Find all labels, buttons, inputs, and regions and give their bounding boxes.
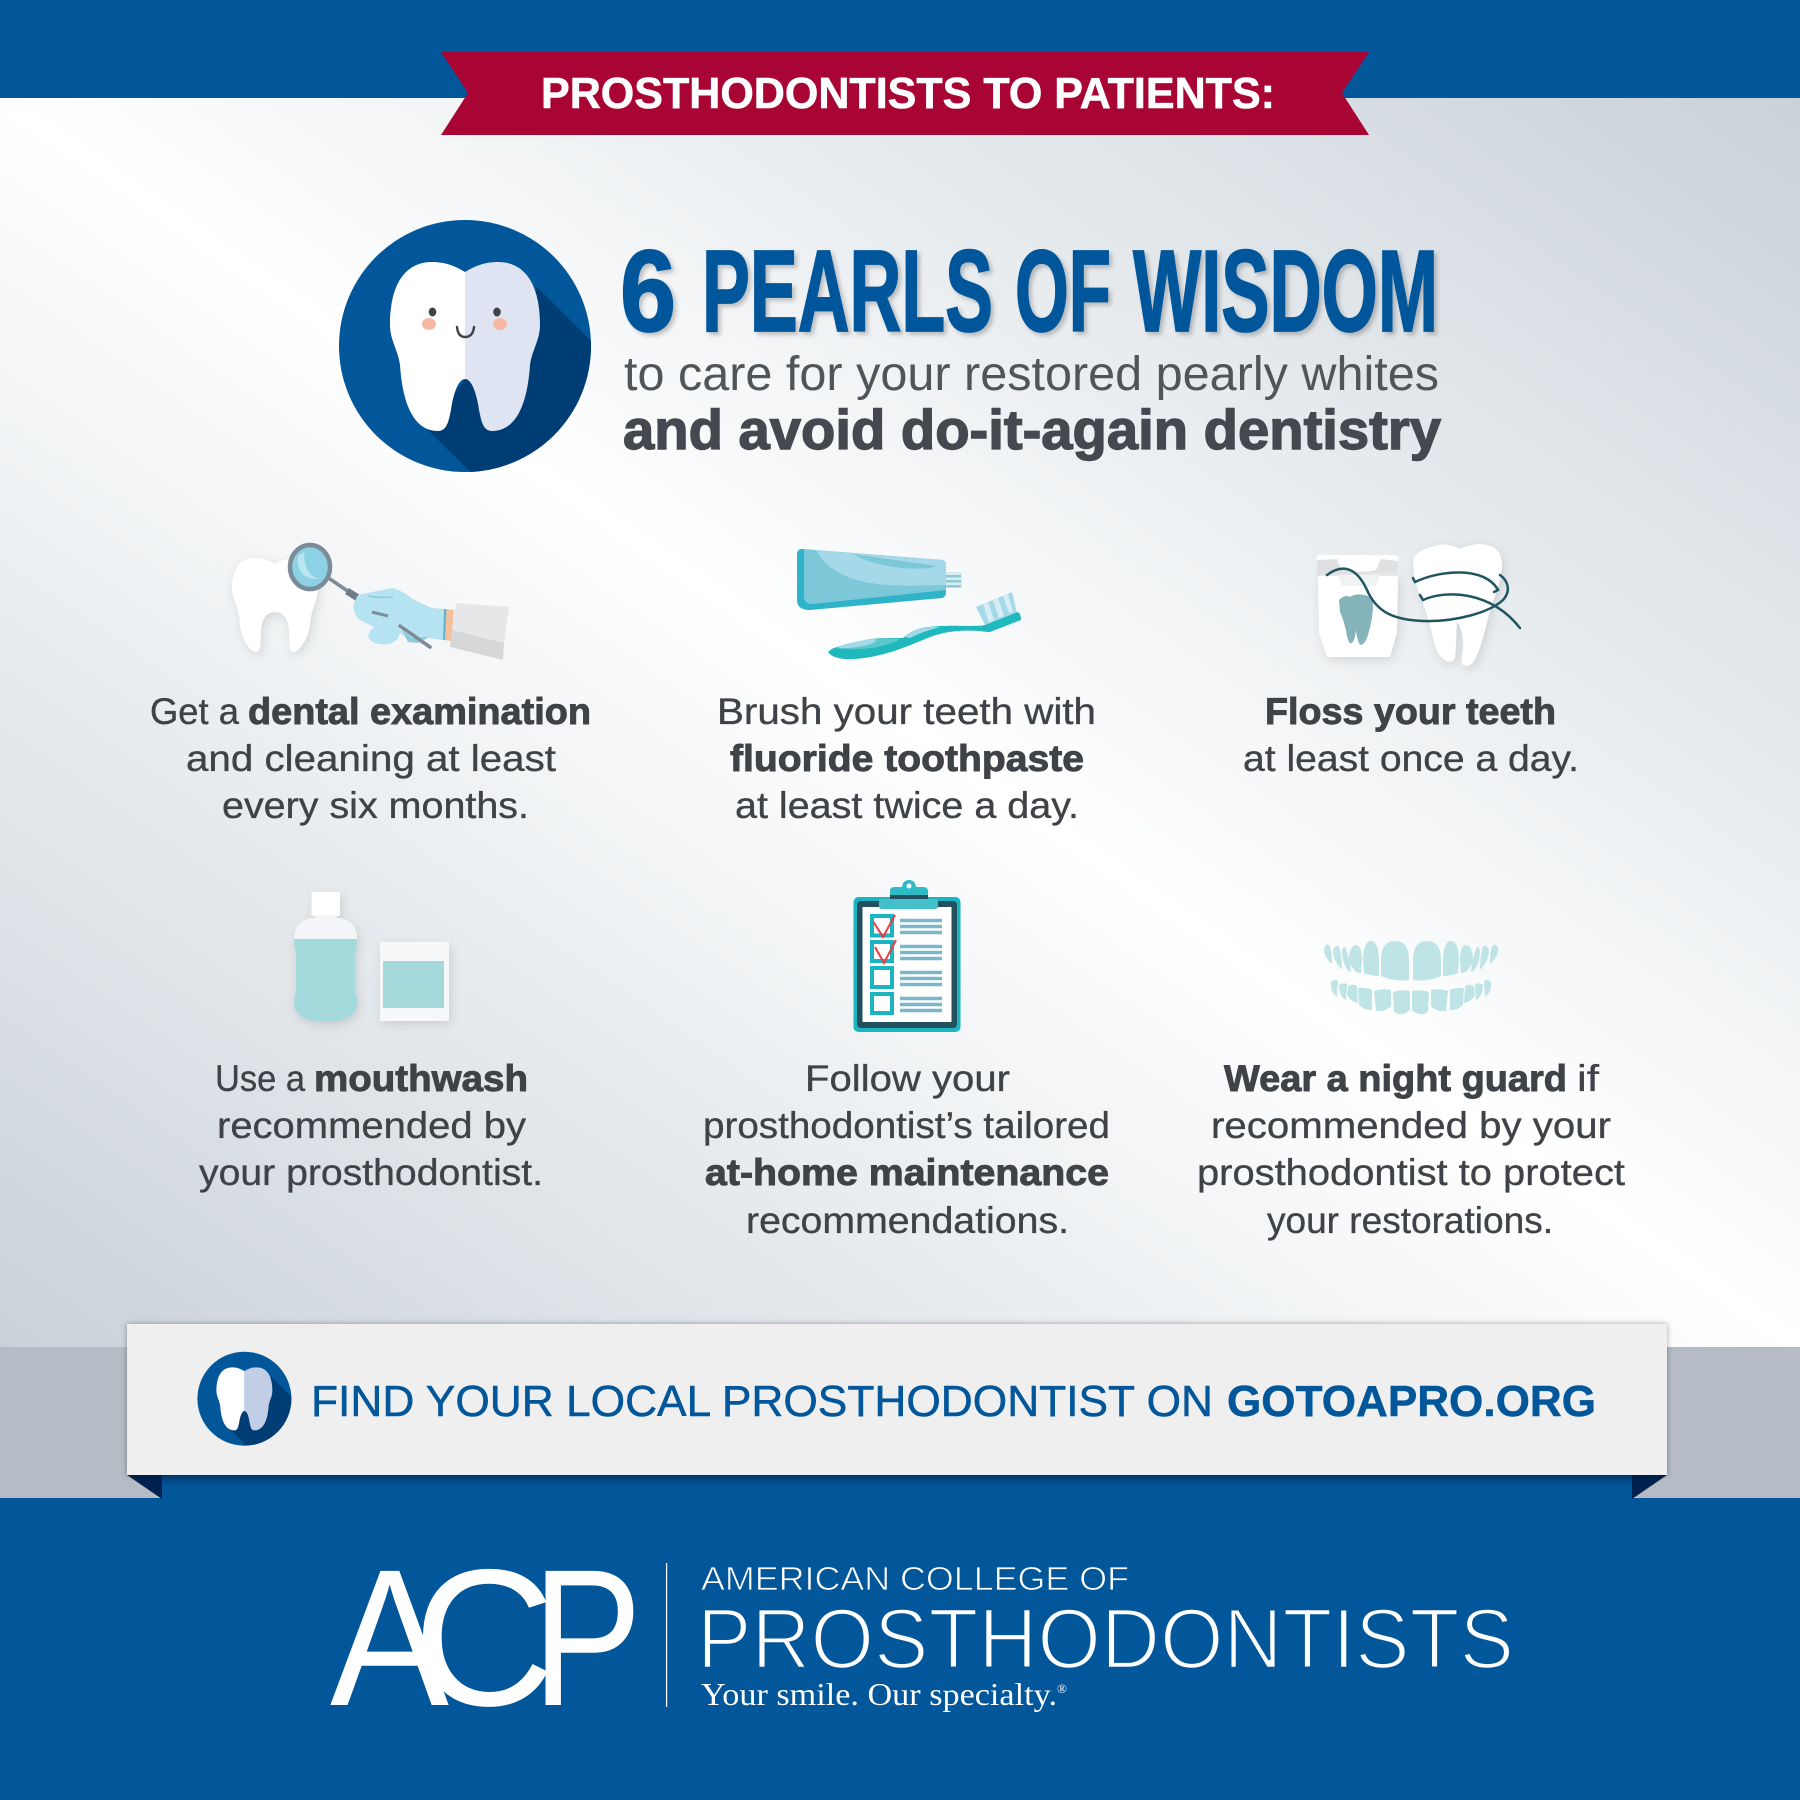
grey band behind call to action bbox=[0, 1347, 1800, 1498]
text: night guard: recommended by your bbox=[1211, 1105, 1611, 1146]
banner ribbon bbox=[441, 52, 1369, 135]
icon: smiling tooth badge bbox=[339, 220, 591, 472]
background gradient bbox=[0, 98, 1800, 1348]
clip bbox=[890, 880, 928, 898]
ribbon folds bbox=[127, 1475, 162, 1499]
call to action bar bbox=[124, 1320, 1670, 1499]
title: 6 bbox=[620, 226, 676, 356]
text: fluoride toothpaste: at least twice a day. bbox=[735, 785, 1079, 826]
footer logo bbox=[330, 1529, 1514, 1747]
icon: clipboard checklist bbox=[854, 880, 960, 1032]
ACP monogram: C bbox=[413, 1529, 555, 1747]
text: mouthwash: your prosthodontist. bbox=[199, 1152, 543, 1193]
icon: small tooth badge bbox=[197, 1352, 292, 1446]
top blue band bbox=[0, 0, 1800, 98]
registered mark: ® bbox=[1057, 1681, 1067, 1696]
icon: night guard teeth bbox=[1324, 941, 1498, 1014]
icon: toothpaste and toothbrush bbox=[797, 549, 1021, 659]
ACP monogram: A bbox=[330, 1529, 449, 1747]
text: night guard: your restorations. bbox=[1267, 1200, 1553, 1241]
blue strip under bar bbox=[162, 1475, 1632, 1498]
checkboxes bbox=[872, 916, 892, 936]
text: fluoride toothpaste: fluoride toothpaste bbox=[730, 738, 1084, 779]
subtitle line one: to care for your restored pearly whites bbox=[624, 348, 1439, 401]
small tooth bbox=[1339, 594, 1373, 645]
text: maintenance: recommendations. bbox=[746, 1200, 1069, 1241]
call to action text: GOTOAPRO.ORG bbox=[1227, 1377, 1596, 1426]
mirror bbox=[290, 545, 330, 589]
icon: mouthwash bbox=[294, 892, 449, 1022]
list lines bbox=[900, 920, 942, 1010]
upper teeth bbox=[1324, 941, 1409, 980]
tagline: Your smile. Our specialty. bbox=[701, 1676, 1057, 1712]
text: floss: at least once a day. bbox=[1243, 738, 1579, 779]
text: night guard: prosthodontist to protect bbox=[1197, 1152, 1626, 1193]
text: floss: Floss your teeth bbox=[1265, 691, 1556, 732]
title: WISDOM bbox=[1133, 226, 1438, 356]
text: night guard: if bbox=[1577, 1058, 1600, 1099]
text: examination: dental examination bbox=[248, 691, 591, 732]
tooth bbox=[232, 558, 318, 652]
text: examination: every six months. bbox=[222, 785, 529, 826]
sleeve bbox=[452, 603, 509, 643]
title: OF bbox=[1015, 226, 1111, 356]
bottle bbox=[294, 892, 357, 1022]
text: maintenance: Follow your bbox=[805, 1058, 1010, 1099]
organization name small: AMERICAN COLLEGE OF bbox=[701, 1560, 1129, 1597]
banner heading: PROSTHODONTISTS TO PATIENTS: bbox=[541, 69, 1275, 118]
text: examination: Get a bbox=[150, 691, 239, 732]
icon: dental examination bbox=[232, 545, 509, 660]
glass bbox=[380, 942, 449, 1021]
ACP monogram bbox=[330, 1529, 642, 1747]
check marks bbox=[874, 915, 895, 937]
bristles bbox=[976, 592, 1017, 625]
text: night guard: Wear a night guard bbox=[1224, 1058, 1567, 1099]
text: examination: and cleaning at least bbox=[186, 738, 557, 779]
text: maintenance: prosthodontist’s tailored bbox=[703, 1105, 1110, 1146]
tube bbox=[797, 549, 946, 610]
brush handle bbox=[828, 612, 1021, 659]
text: mouthwash: Use a bbox=[215, 1058, 305, 1099]
molar bbox=[1413, 544, 1502, 666]
floss strand bbox=[1327, 569, 1520, 628]
text: fluoride toothpaste: Brush your teeth with bbox=[717, 691, 1096, 732]
footer blue panel bbox=[0, 1498, 1800, 1800]
text: maintenance: at-home maintenance bbox=[705, 1152, 1109, 1193]
nozzle bbox=[946, 572, 962, 588]
title bbox=[620, 226, 1438, 356]
floss box bbox=[1318, 576, 1398, 657]
text: mouthwash: mouthwash bbox=[314, 1058, 528, 1099]
title: PEARLS bbox=[702, 226, 993, 356]
glove bbox=[354, 588, 445, 644]
lower teeth bbox=[1331, 980, 1410, 1014]
icon: floss bbox=[1317, 544, 1520, 666]
subtitle line two: and avoid do-it-again dentistry bbox=[623, 398, 1441, 461]
ACP monogram: P bbox=[532, 1529, 642, 1747]
organization name large: PROSTHODONTISTS bbox=[697, 1592, 1514, 1687]
text: mouthwash: recommended by bbox=[217, 1105, 527, 1146]
probe handle bbox=[330, 579, 430, 647]
call to action text: FIND YOUR LOCAL PROSTHODONTIST ON bbox=[311, 1377, 1213, 1426]
